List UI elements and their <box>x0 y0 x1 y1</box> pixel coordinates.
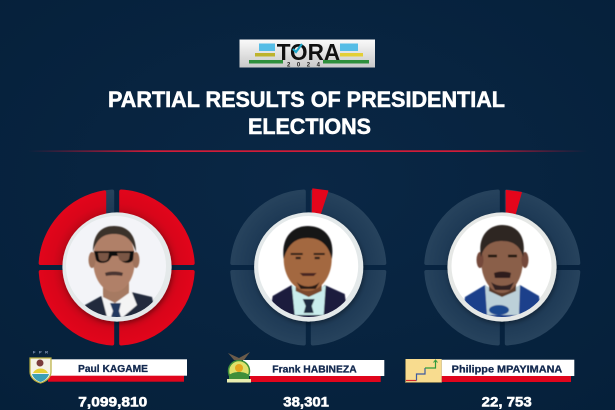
portrait: Paul Kagame <box>62 212 172 322</box>
icon: FPR party emblem <box>30 350 51 383</box>
icon: Democratic Green Party emblem <box>227 352 251 382</box>
logo: Tora 2024: TORA <box>277 39 340 65</box>
name label: Philippe Mpayimana <box>442 360 574 382</box>
name label: Philippe Mpayimana: Philippe MPAYIMANA <box>452 363 563 375</box>
panel: Philippe Mpayimana <box>405 190 578 410</box>
name label: Paul Kagame <box>48 359 187 382</box>
vote count: Kagame: 7,099,810 <box>78 394 148 410</box>
vote count: Mpayimana: 22, 753 <box>482 394 532 410</box>
title <box>108 87 505 139</box>
icon: staircase emblem <box>405 359 442 383</box>
title: PARTIAL RESULTS OF PRESIDENTIAL <box>108 87 505 112</box>
donut chart: Habineza <box>232 189 384 344</box>
panel: Frank Habineza <box>227 189 384 410</box>
name label: Frank Habineza: Frank HABINEZA <box>272 364 357 376</box>
title: ELECTIONS <box>248 114 371 139</box>
logo: Tora 2024: 2024 <box>287 62 321 68</box>
vote count: Habineza: 38,301 <box>283 394 329 410</box>
portrait: Frank Habineza <box>254 212 363 322</box>
logo: Tora 2024 <box>240 39 375 68</box>
name label: Frank Habineza <box>243 360 384 382</box>
name label: Paul Kagame: Paul KAGAME <box>78 363 148 375</box>
divider line <box>28 150 587 152</box>
panel: Paul Kagame <box>30 192 193 410</box>
icon: FPR party emblem: FPR <box>33 350 48 354</box>
donut chart: Kagame <box>41 192 193 344</box>
portrait: Philippe Mpayimana <box>447 212 557 322</box>
donut chart: Mpayimana <box>426 190 578 344</box>
